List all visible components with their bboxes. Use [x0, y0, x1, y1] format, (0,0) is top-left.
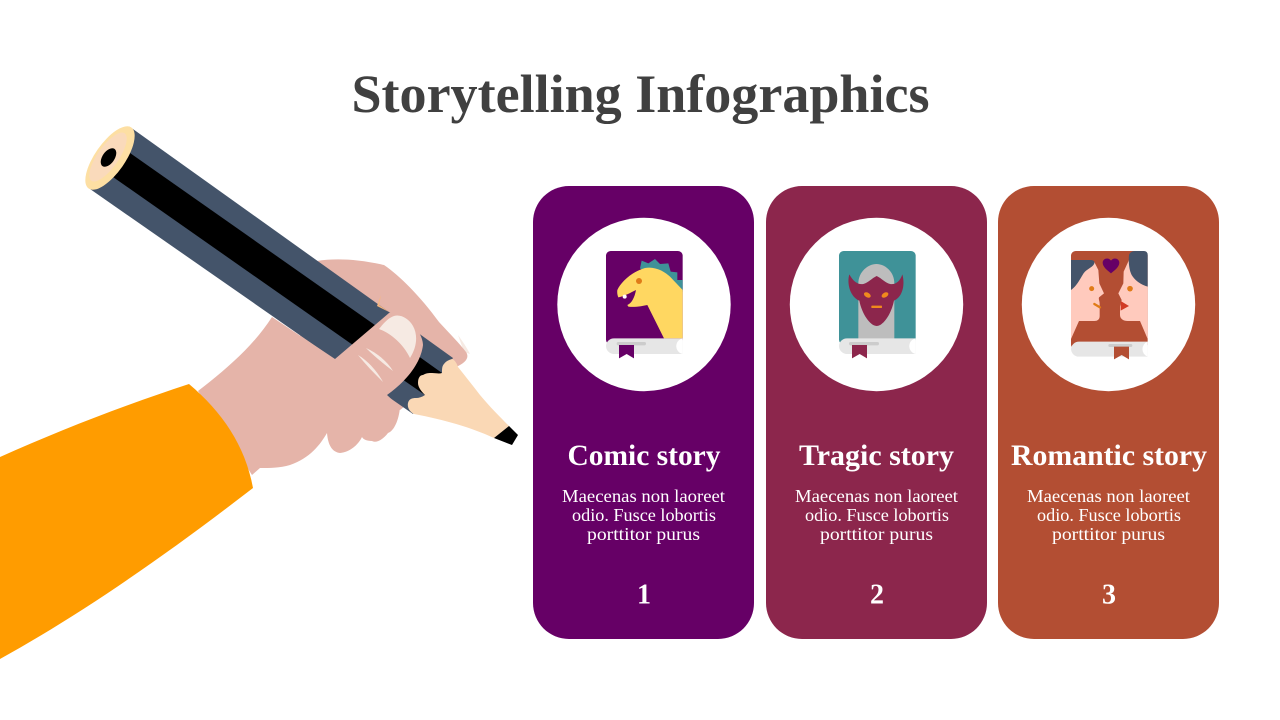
icon circle [557, 218, 731, 391]
body text [795, 486, 958, 544]
card background [533, 186, 754, 639]
card background [766, 186, 987, 639]
body text [1027, 486, 1190, 544]
pencil end: wood and lead hole [76, 119, 144, 197]
thumb creases [358, 348, 393, 382]
small orange mark [377, 295, 389, 312]
panel: romantic story [998, 186, 1219, 639]
number: 1 [637, 580, 651, 610]
body text: Maecenas non laoreet [1027, 486, 1190, 506]
body text: porttitor purus [820, 524, 933, 544]
panel: comic story [533, 186, 754, 639]
sleeve [0, 384, 253, 659]
body text: Maecenas non laoreet [795, 486, 958, 506]
number: 3 [1102, 580, 1116, 610]
body text: Maecenas non laoreet [562, 486, 725, 506]
hand: back fingers [300, 259, 467, 410]
panel: tragic story [766, 186, 987, 639]
body text: odio. Fusce lobortis [1037, 505, 1181, 525]
icon: devil book [839, 251, 916, 358]
body text: porttitor purus [1052, 524, 1165, 544]
card background [998, 186, 1219, 639]
icon: lovers book [1071, 251, 1148, 359]
body text [562, 486, 725, 544]
pencil body [76, 119, 453, 414]
heading: Comic story [568, 439, 720, 472]
body text: odio. Fusce lobortis [805, 505, 949, 525]
number: 2 [870, 580, 884, 610]
illustration: hand writing with pencil [0, 119, 518, 659]
heading: Romantic story [1011, 439, 1207, 472]
body text: odio. Fusce lobortis [572, 505, 716, 525]
body text: porttitor purus [587, 524, 700, 544]
title: Storytelling Infographics [352, 64, 930, 124]
finger highlight [458, 335, 470, 354]
heading: Tragic story [799, 439, 954, 472]
icon: dinosaur book [606, 251, 683, 358]
pencil lead point [494, 426, 518, 445]
hand: palm and thumb [198, 313, 423, 475]
pencil wood tip [408, 359, 509, 438]
icon circle [790, 218, 963, 391]
thumb nail [379, 316, 416, 358]
icon circle [1022, 218, 1195, 391]
